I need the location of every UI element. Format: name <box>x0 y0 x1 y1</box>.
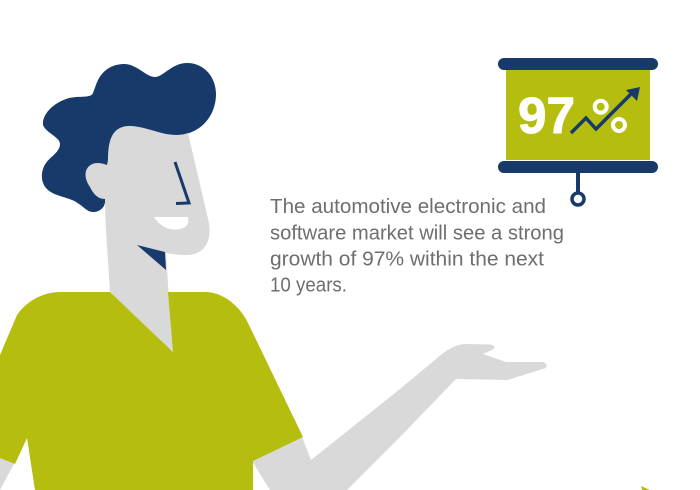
green shirt <box>0 292 303 490</box>
head and neck <box>86 126 210 352</box>
description text: growth of 97% within the next <box>270 248 544 270</box>
top bar <box>498 58 658 70</box>
right arm and hand <box>250 344 547 490</box>
percent circles <box>595 101 625 131</box>
board screen <box>506 69 650 160</box>
stand ring <box>572 193 584 205</box>
stand stem <box>576 172 580 194</box>
green corner fragment <box>641 486 650 490</box>
growth arrow <box>571 87 640 133</box>
description text: software market will see a strong <box>270 222 564 244</box>
bottom bar <box>498 161 658 173</box>
smile <box>154 217 188 229</box>
person illustration <box>0 63 547 490</box>
description text: 10 years. <box>270 274 347 296</box>
description text <box>270 195 564 296</box>
nose line <box>175 162 189 204</box>
presentation board <box>498 58 658 205</box>
value 97: 97 <box>518 87 575 144</box>
left arm <box>0 456 15 490</box>
hair <box>42 63 216 212</box>
description text: The automotive electronic and <box>270 195 546 218</box>
chin shadow <box>137 245 166 270</box>
